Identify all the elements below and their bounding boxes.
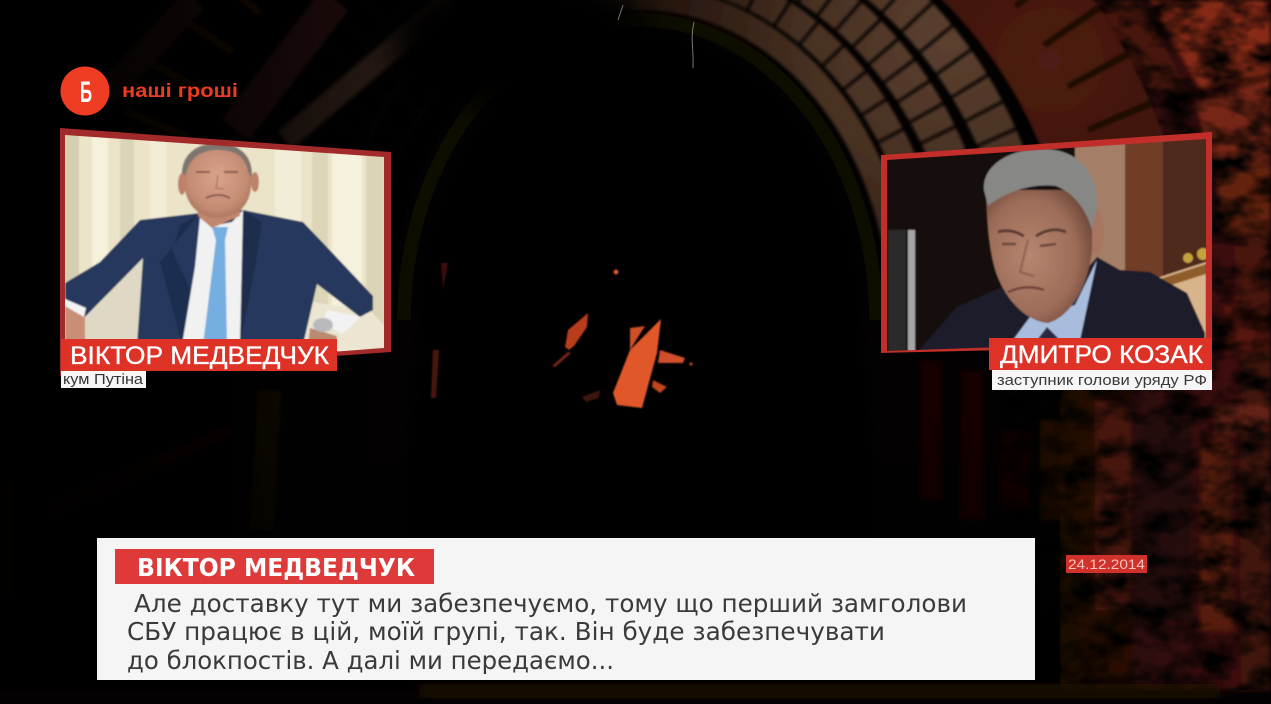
hair bbox=[984, 149, 1097, 230]
left side darkening bbox=[0, 0, 420, 690]
hanging wires bbox=[618, 5, 694, 68]
glowing fire at tunnel centre bbox=[431, 263, 693, 408]
dark tunnel mouth bbox=[400, 35, 880, 538]
shirt bbox=[182, 210, 243, 345]
frame bbox=[60, 128, 391, 376]
left hand and cuff bbox=[65, 306, 86, 339]
tie bbox=[203, 227, 228, 345]
facial features bbox=[998, 230, 1066, 236]
date stamp: 24.12.2014 bbox=[1068, 556, 1145, 572]
gilded chair bbox=[1158, 261, 1206, 338]
panel: Dmytro Kozak portrait bbox=[881, 132, 1212, 355]
right cuff, watch and hand bbox=[322, 310, 361, 334]
speaker tag: ВІКТОР МЕДВЕДЧУК bbox=[137, 553, 416, 582]
logo: circular badge: Б bbox=[80, 76, 92, 109]
suit jacket bbox=[915, 257, 1205, 355]
logo: circular badge bbox=[60, 66, 110, 116]
sofa bbox=[85, 258, 143, 345]
panel: quote transcript bbox=[97, 538, 1035, 680]
tie bbox=[1038, 326, 1059, 338]
shirt bbox=[1013, 260, 1097, 340]
name plate: Dmytro Kozak: ДМИТРО КОЗАК bbox=[1000, 341, 1203, 369]
glass door reflection bbox=[888, 230, 906, 352]
floor glow bbox=[420, 684, 1220, 698]
caption: Viktor Medvedchuk role: кум Путіна bbox=[63, 371, 144, 388]
programme title: наші гроші bbox=[122, 80, 238, 102]
quote text: Але доставку тут ми забезпечуємо, тому що перший замголови bbox=[134, 589, 967, 618]
quote text: до блокпостів. А далі ми передаємо... bbox=[127, 646, 614, 675]
tunnel arches bbox=[120, 0, 1160, 320]
portrait photo bbox=[885, 135, 1210, 355]
panel: Viktor Medvedchuk portrait bbox=[60, 128, 391, 376]
portrait photo bbox=[65, 135, 384, 352]
left wall ribs bbox=[5, 0, 450, 640]
ear bbox=[1093, 212, 1103, 252]
suit jacket bbox=[65, 210, 373, 345]
caption: Dmytro Kozak role bbox=[992, 370, 1212, 390]
mottled stone texture bbox=[1000, 0, 1271, 690]
quote text: СБУ працює в цій, моїй групі, так. Він буде забезпечувати bbox=[127, 617, 885, 646]
caption: Dmytro Kozak role: заступник голови уряду РФ bbox=[997, 373, 1207, 389]
frame bbox=[881, 132, 1212, 353]
quote text bbox=[127, 589, 967, 675]
right brick wall bbox=[920, 0, 1271, 690]
neck bbox=[196, 210, 241, 228]
head bbox=[183, 144, 252, 218]
name plate: Viktor Medvedchuk: ВІКТОР МЕДВЕДЧУК bbox=[70, 342, 329, 370]
upper shadow over the crown of the arch bbox=[390, 0, 650, 110]
face bbox=[986, 190, 1092, 323]
